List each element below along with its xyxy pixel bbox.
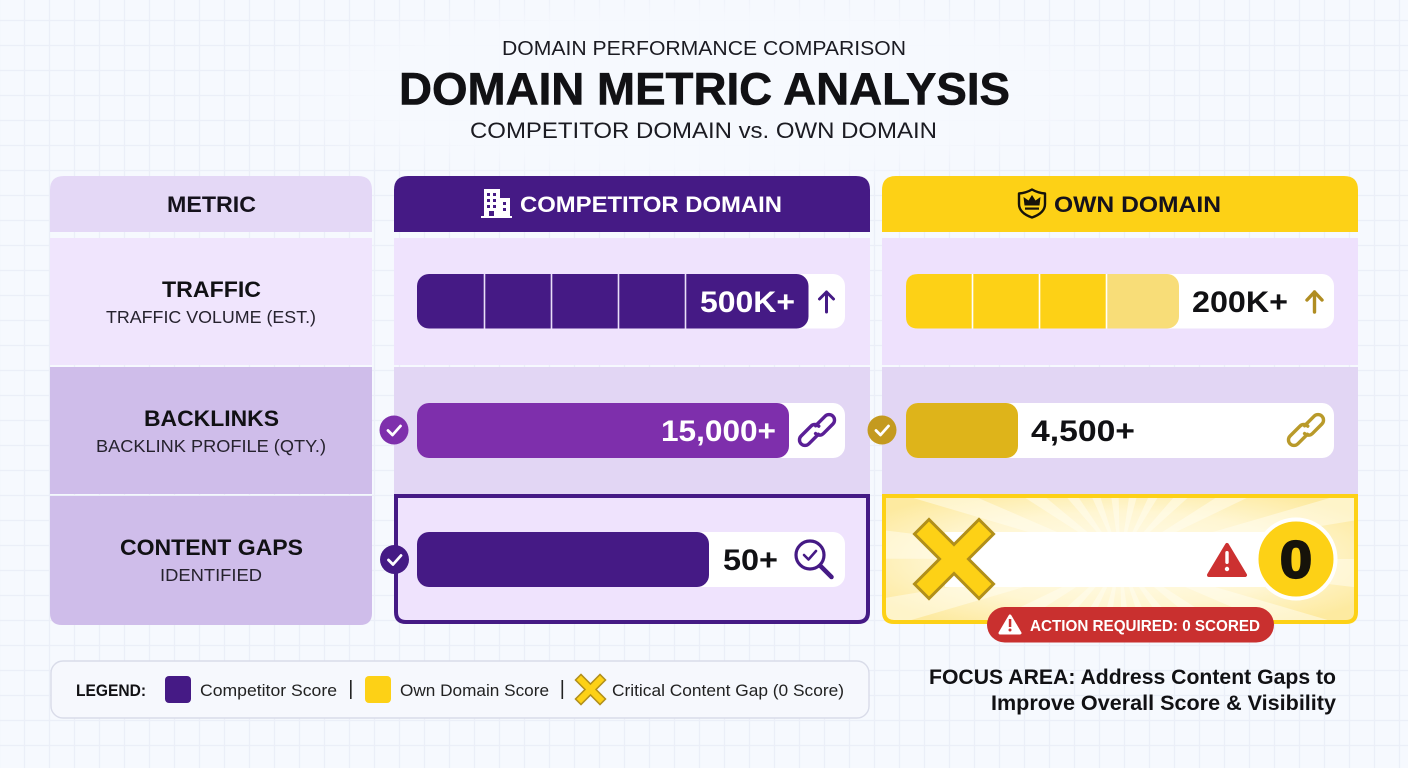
competitor row: content gaps [380, 496, 868, 622]
metric row: content gaps [50, 496, 372, 625]
own domain header [882, 176, 1358, 232]
alert pill: action required [987, 607, 1274, 642]
icon: up arrow [1307, 292, 1322, 312]
legend swatch: own domain [365, 676, 391, 703]
metric row: traffic [50, 238, 372, 365]
bar: 200K+ traffic: 200K+ [1192, 286, 1288, 319]
bar: 15,000+ backlinks [417, 403, 845, 458]
metric header: METRIC [167, 192, 256, 217]
panel: metric column [50, 176, 372, 625]
bar: 50+ content gaps [417, 532, 845, 587]
legend: Own Domain Score [400, 681, 549, 700]
bar: 50+ content gaps: 50+ [723, 544, 778, 577]
score badge: zero [1256, 520, 1336, 598]
icon: warning triangle [1209, 545, 1245, 575]
focus area callout: FOCUS AREA: Address Content Gaps to [929, 666, 1336, 689]
legend swatch: competitor [165, 676, 191, 703]
focus area callout: Improve Overall Score & Visibility [991, 692, 1336, 715]
competitor header: COMPETITOR DOMAIN [520, 192, 782, 217]
metric row: backlinks: BACKLINK PROFILE (QTY.) [96, 436, 326, 456]
icon: check badge [868, 416, 896, 444]
main title: DOMAIN METRIC ANALYSIS [399, 64, 1010, 114]
metric row: backlinks [50, 367, 372, 494]
focus area callout [929, 666, 1336, 715]
own domain row: backlinks [868, 367, 1358, 494]
metric row: traffic: TRAFFIC [162, 277, 261, 302]
icon: check badge [380, 416, 408, 444]
icon: link [1286, 410, 1326, 450]
metric header [50, 176, 372, 232]
icon: link [797, 410, 837, 450]
icon: large X mark [914, 520, 994, 598]
score badge: zero: 0 [1280, 532, 1312, 590]
legend: LEGEND: [76, 682, 146, 700]
subtitle: COMPETITOR DOMAIN vs. OWN DOMAIN [470, 118, 937, 143]
icon: magnifier with check [796, 541, 832, 577]
eyebrow heading: DOMAIN PERFORMANCE COMPARISON [502, 37, 906, 60]
alert pill: action required: ACTION REQUIRED: 0 SCORED [1030, 618, 1260, 635]
title block [399, 37, 1010, 143]
own domain row: critical content gap [882, 494, 1358, 642]
legend: Critical Content Gap (0 Score) [612, 681, 844, 700]
metric row: traffic: TRAFFIC VOLUME (EST.) [106, 307, 316, 327]
bar: 15,000+ backlinks: 15,000+ [661, 415, 776, 448]
bar: 500K+ traffic: 500K+ [700, 286, 795, 319]
legend: Competitor Score [200, 681, 337, 700]
legend [51, 661, 869, 718]
panel: own domain column [868, 176, 1358, 642]
icon: building [481, 189, 512, 218]
bar: 200K+ traffic [906, 274, 1334, 328]
icon: shield with crown [1019, 190, 1045, 218]
icon: check badge [380, 545, 409, 574]
empty score track [945, 532, 1265, 587]
metric row: content gaps: IDENTIFIED [160, 565, 262, 585]
metric row: backlinks: BACKLINKS [144, 406, 279, 431]
bar: 500K+ traffic [417, 274, 845, 328]
metric row: content gaps: CONTENT GAPS [120, 535, 303, 560]
own domain row: traffic [882, 238, 1358, 365]
icon: up arrow [820, 292, 834, 312]
own domain header: OWN DOMAIN [1054, 192, 1221, 217]
panel: competitor domain column [380, 176, 870, 622]
competitor row: traffic [394, 238, 870, 365]
legend icon: X mark [575, 674, 606, 705]
competitor header [394, 176, 870, 232]
sunburst alert background [882, 494, 1358, 624]
competitor row: backlinks [380, 367, 870, 494]
bar: 4,500+ backlinks: 4,500+ [1031, 415, 1135, 448]
bar: 4,500+ backlinks [906, 403, 1334, 458]
